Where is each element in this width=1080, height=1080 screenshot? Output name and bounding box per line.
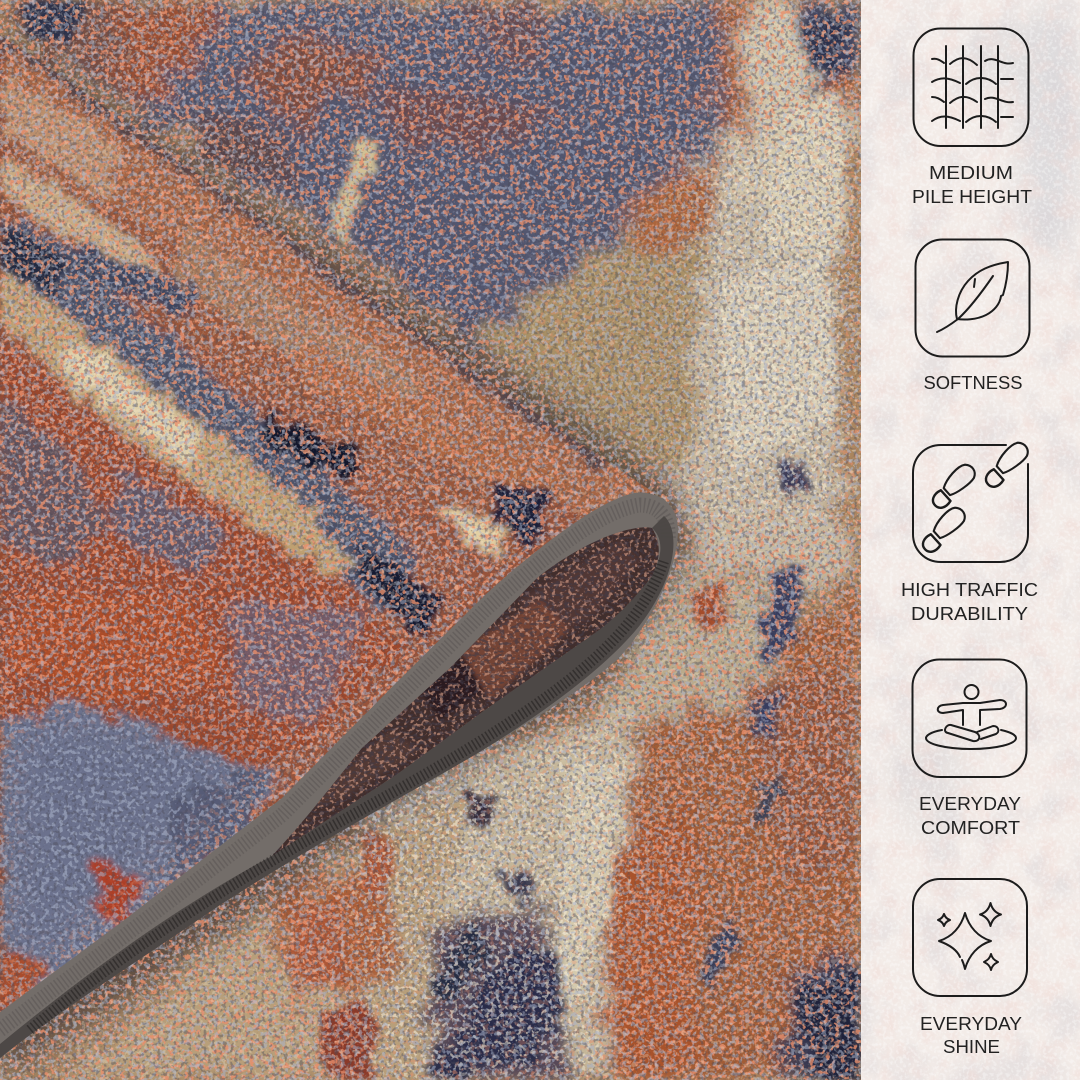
label: medium pile height xyxy=(912,162,1032,207)
feature: softness xyxy=(916,240,1030,393)
roll band: lower rust field xyxy=(0,340,410,800)
contact shadow under the roll xyxy=(0,30,690,1080)
roll band: dark blue xyxy=(0,215,420,610)
label: everyday shine xyxy=(920,1013,1022,1057)
icon: seated meditation xyxy=(912,660,1026,777)
label: everyday comfort xyxy=(919,793,1021,838)
label: high traffic durability xyxy=(901,579,1038,624)
rug yarn texture xyxy=(0,0,861,1080)
label: everyday comfort: COMFORT xyxy=(921,817,1020,838)
roll band: cream stripe xyxy=(0,270,350,575)
floor rug colour fields xyxy=(0,0,861,1080)
label: everyday shine: EVERYDAY xyxy=(920,1013,1022,1034)
icon: footprints xyxy=(913,439,1032,562)
label: everyday comfort: EVERYDAY xyxy=(919,793,1021,814)
lower dark binding xyxy=(0,516,673,1058)
serged border xyxy=(0,493,678,1058)
feature: high traffic durability xyxy=(901,439,1038,624)
panel: rug photograph xyxy=(0,0,861,1080)
roll crest shadow xyxy=(0,35,610,465)
roll band: blue-grey field xyxy=(0,700,285,1030)
label: medium pile height: MEDIUM xyxy=(929,162,1013,183)
feature: medium pile height xyxy=(912,28,1032,207)
label: high traffic durability: DURABILITY xyxy=(911,603,1028,624)
rolled rug underside edge xyxy=(0,493,678,1058)
icon: feather xyxy=(916,240,1030,356)
label: everyday shine: SHINE xyxy=(943,1036,1000,1057)
feature: everyday shine xyxy=(913,879,1027,1057)
roll band: outer rust and cream xyxy=(2,40,650,518)
feature: everyday comfort xyxy=(912,660,1026,838)
floor rug dark and light accents xyxy=(20,0,860,1080)
label: high traffic durability: HIGH TRAFFIC xyxy=(901,579,1038,600)
border stitching lines xyxy=(0,505,668,1030)
label: softness: SOFTNESS xyxy=(924,372,1022,393)
icon: pile weave xyxy=(914,28,1028,146)
rolled rug top surface xyxy=(0,35,650,1011)
label: medium pile height: PILE HEIGHT xyxy=(912,186,1032,207)
rug backing weave xyxy=(272,527,659,856)
icon: sparkles xyxy=(913,879,1027,996)
panel: features sidebar xyxy=(861,0,1080,1080)
